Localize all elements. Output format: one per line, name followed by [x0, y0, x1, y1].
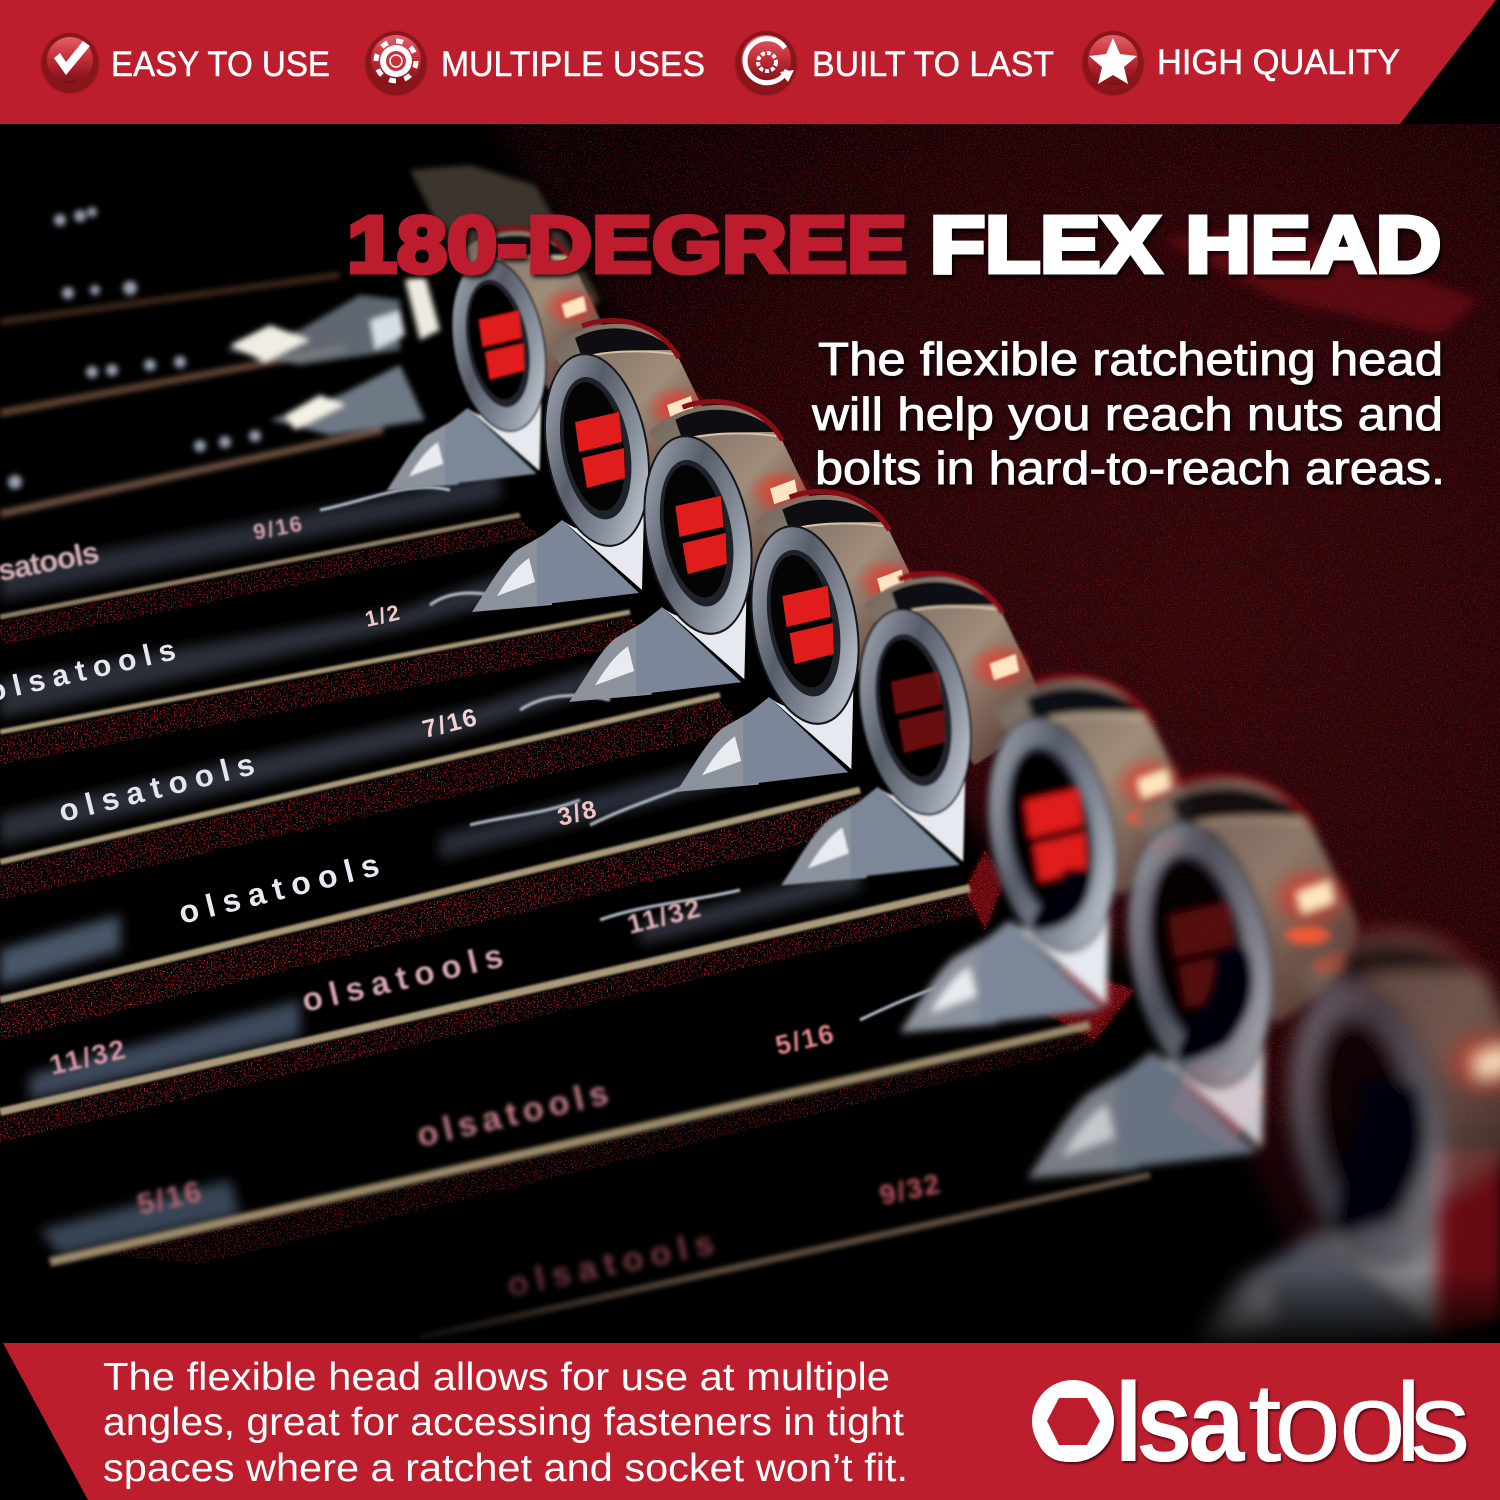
header band — [0, 0, 1496, 124]
feature: multiple uses — [366, 31, 705, 93]
icon: arrows and gear badge — [736, 31, 796, 93]
feature: built to last: BUILT TO LAST — [812, 45, 1054, 84]
title — [347, 200, 1441, 289]
icon: gear badge — [366, 31, 426, 93]
wrench heads — [386, 228, 1500, 1368]
engraved size and brand marks on the wrenches: 3/8 — [555, 795, 601, 832]
engraved size and brand marks on the wrenches: 5/16 — [134, 1175, 206, 1222]
title: FLEX HEAD — [930, 200, 1441, 289]
feature: built to last — [736, 31, 1054, 93]
text block: footer description: angles, great for accessing fasteners in tight — [103, 1401, 904, 1444]
title: 180-DEGREE — [347, 200, 907, 289]
engraved size and brand marks on the wrenches: olsatools — [298, 937, 506, 1019]
text block: flexible ratcheting head: will help you reach nuts and — [811, 388, 1443, 440]
engraved size and brand marks on the wrenches: 9/32 — [877, 1168, 944, 1211]
wrench shafts — [0, 470, 1150, 1338]
feature: high quality: HIGH QUALITY — [1157, 43, 1400, 82]
engraved size and brand marks on the wrenches: 11/32 — [46, 1033, 130, 1081]
metal glints near the wrench necks — [320, 487, 970, 1020]
feature: multiple uses: MULTIPLE USES — [441, 45, 705, 84]
feature: easy to use — [42, 33, 330, 91]
red reflections on the mat between wrench shafts — [0, 520, 1095, 1264]
text block: footer description: The flexible head allows for use at multiple — [103, 1356, 890, 1399]
engraved size and brand marks on the wrenches: 9/16 — [251, 511, 306, 545]
feature: high quality — [1083, 31, 1400, 93]
engraved size and brand marks on the wrenches: olsatools — [55, 746, 258, 829]
icon: check badge — [42, 33, 98, 91]
text block: flexible ratcheting head — [811, 333, 1445, 494]
feature: easy to use: EASY TO USE — [111, 45, 330, 84]
logo: Olsatools: Olsa — [1030, 1360, 1245, 1485]
engraved size and brand marks on the wrenches: olsatools — [504, 1224, 717, 1305]
engraved size and brand marks on the wrenches — [0, 511, 944, 1305]
engraved size and brand marks on the wrenches: 7/16 — [420, 703, 481, 744]
logo: Olsatools — [1030, 1359, 1470, 1485]
engraved size and brand marks on the wrenches: 11/32 — [624, 892, 705, 940]
logo: Olsatools: tools — [1248, 1359, 1470, 1485]
footer band — [3, 1343, 1500, 1500]
text block: flexible ratcheting head: The flexible ratcheting head — [818, 333, 1443, 385]
engraved size and brand marks on the wrenches: olsatools — [175, 846, 383, 931]
blurred far wrenches, upper left — [0, 165, 600, 514]
icon: star badge — [1083, 31, 1143, 93]
text block: footer description: spaces where a ratchet and socket won’t fit. — [103, 1447, 908, 1490]
engraved size and brand marks on the wrenches: 5/16 — [773, 1018, 838, 1061]
text block: footer description — [103, 1356, 908, 1490]
text block: flexible ratcheting head: bolts in hard-to-reach areas. — [815, 442, 1445, 494]
engraved size and brand marks on the wrenches: 1/2 — [363, 599, 404, 632]
engraved size and brand marks on the wrenches: olsatools — [413, 1074, 612, 1155]
